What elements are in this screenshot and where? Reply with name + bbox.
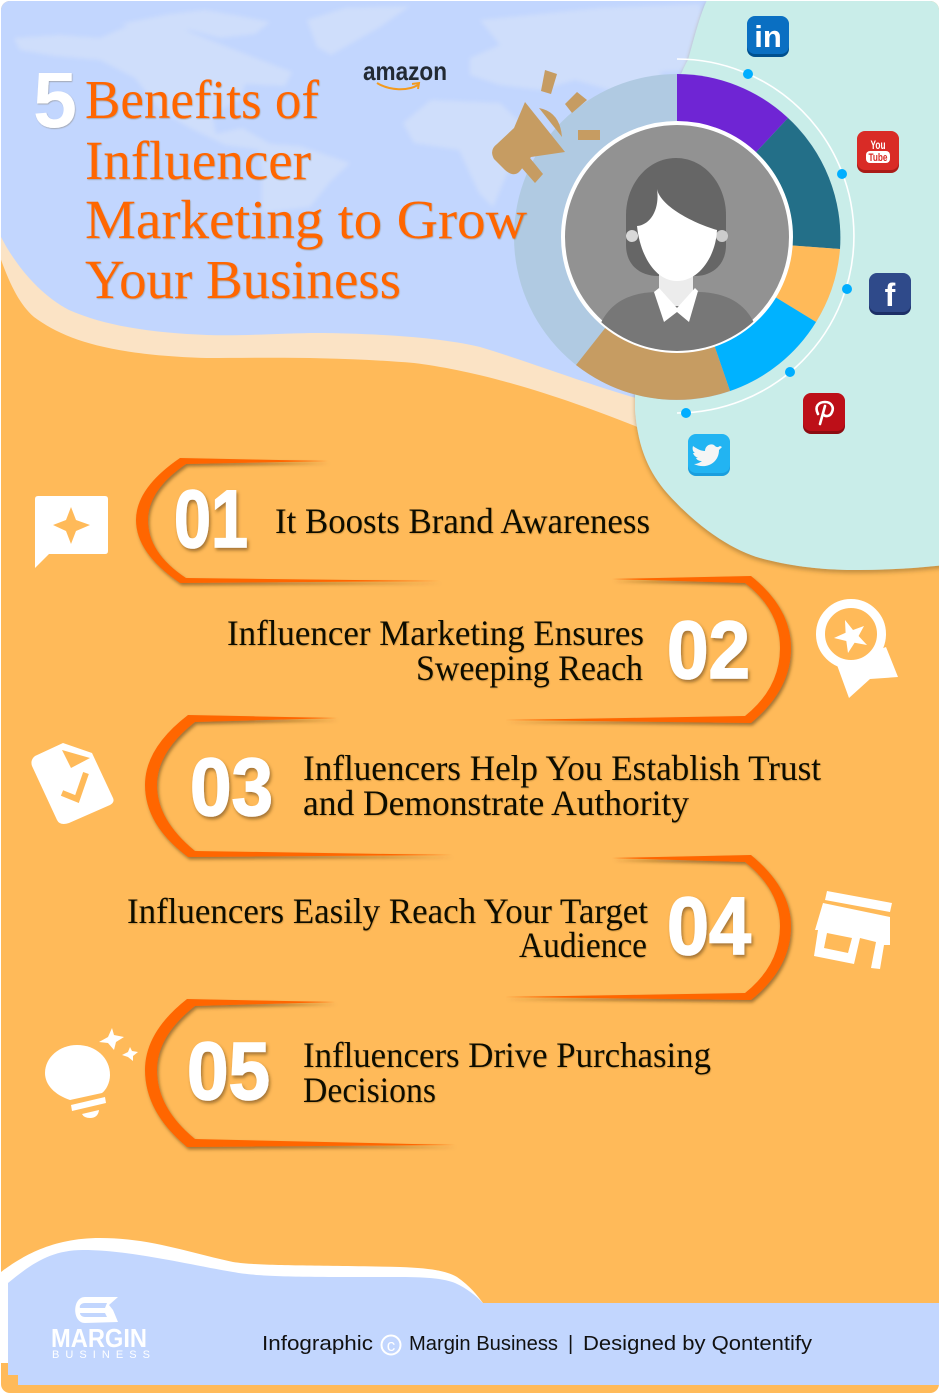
icon: facebook [869,273,911,315]
number: 03 [190,742,273,833]
bracket [505,855,791,1000]
icon: storefront [814,891,892,969]
credit line: Designed by Qontentify [583,1333,812,1355]
item 02 [227,576,898,723]
header peach wave [0,225,640,428]
label: Sweeping Reach [416,648,643,688]
teal social panel [635,0,940,570]
bracket [145,999,455,1147]
icon: facebook: f [885,277,896,313]
label: Influencers Drive Purchasing [303,1035,711,1075]
logo: margin business: MARGIN [51,1323,147,1353]
label: Decisions [303,1070,436,1110]
title lines: Influencer [85,130,311,191]
amazon logo: amazon [363,56,447,86]
number: 01 [174,474,248,565]
logo: margin business: BUSINESS [52,1349,150,1361]
logo: margin business [51,1297,150,1361]
icon: linkedin [747,16,789,57]
icon: twitter [688,434,730,476]
label: Influencers Help You Establish Trust [303,748,821,788]
label: and Demonstrate Authority [303,783,689,823]
title lines: Marketing to Grow [85,189,527,250]
credit line: | [568,1333,573,1355]
title lines: Your Business [85,249,401,310]
world map [14,4,712,213]
bracket [505,576,791,723]
credit line [262,1333,812,1355]
icon: youtube [857,131,899,173]
credit line: c [387,1336,396,1355]
item 05 [45,999,711,1147]
label [127,891,648,965]
icon: pinterest [803,393,845,434]
item 03 [31,715,821,857]
icon: medal [820,604,898,698]
footer blue panel [8,1250,939,1385]
label [303,748,821,823]
credit line: Margin Business [409,1333,558,1355]
icon: youtube: Tube [868,152,888,164]
label: It Boosts Brand Awareness [275,501,650,541]
label: Influencer Marketing Ensures [227,613,644,653]
header blue panel [0,0,720,420]
icon: checklist document [31,743,114,824]
footer [1,1238,939,1385]
icon: linkedin: in [754,19,782,54]
label [227,613,644,688]
credit line: Infographic [262,1333,373,1355]
profile portrait [563,123,791,360]
footer white wave [1,1238,483,1363]
numeral 5: 5 [33,55,77,144]
label [303,1035,711,1110]
title lines [85,69,527,310]
title lines: Benefits of [85,69,320,130]
number: 02 [667,605,750,696]
bracket [145,715,452,857]
bracket [136,458,440,583]
item 01 [35,458,650,583]
label: Audience [519,925,647,965]
title [33,55,527,310]
megaphone icon [492,70,600,183]
icon: speech bubble star [35,496,108,568]
number: 04 [667,881,751,972]
item 04 [127,855,892,1000]
icon: youtube: You [870,138,886,152]
label: Influencers Easily Reach Your Target [127,891,648,931]
donut chart [514,74,840,400]
icon: light bulb [45,1028,138,1118]
number: 05 [187,1026,270,1117]
dotted orbit [677,59,854,418]
